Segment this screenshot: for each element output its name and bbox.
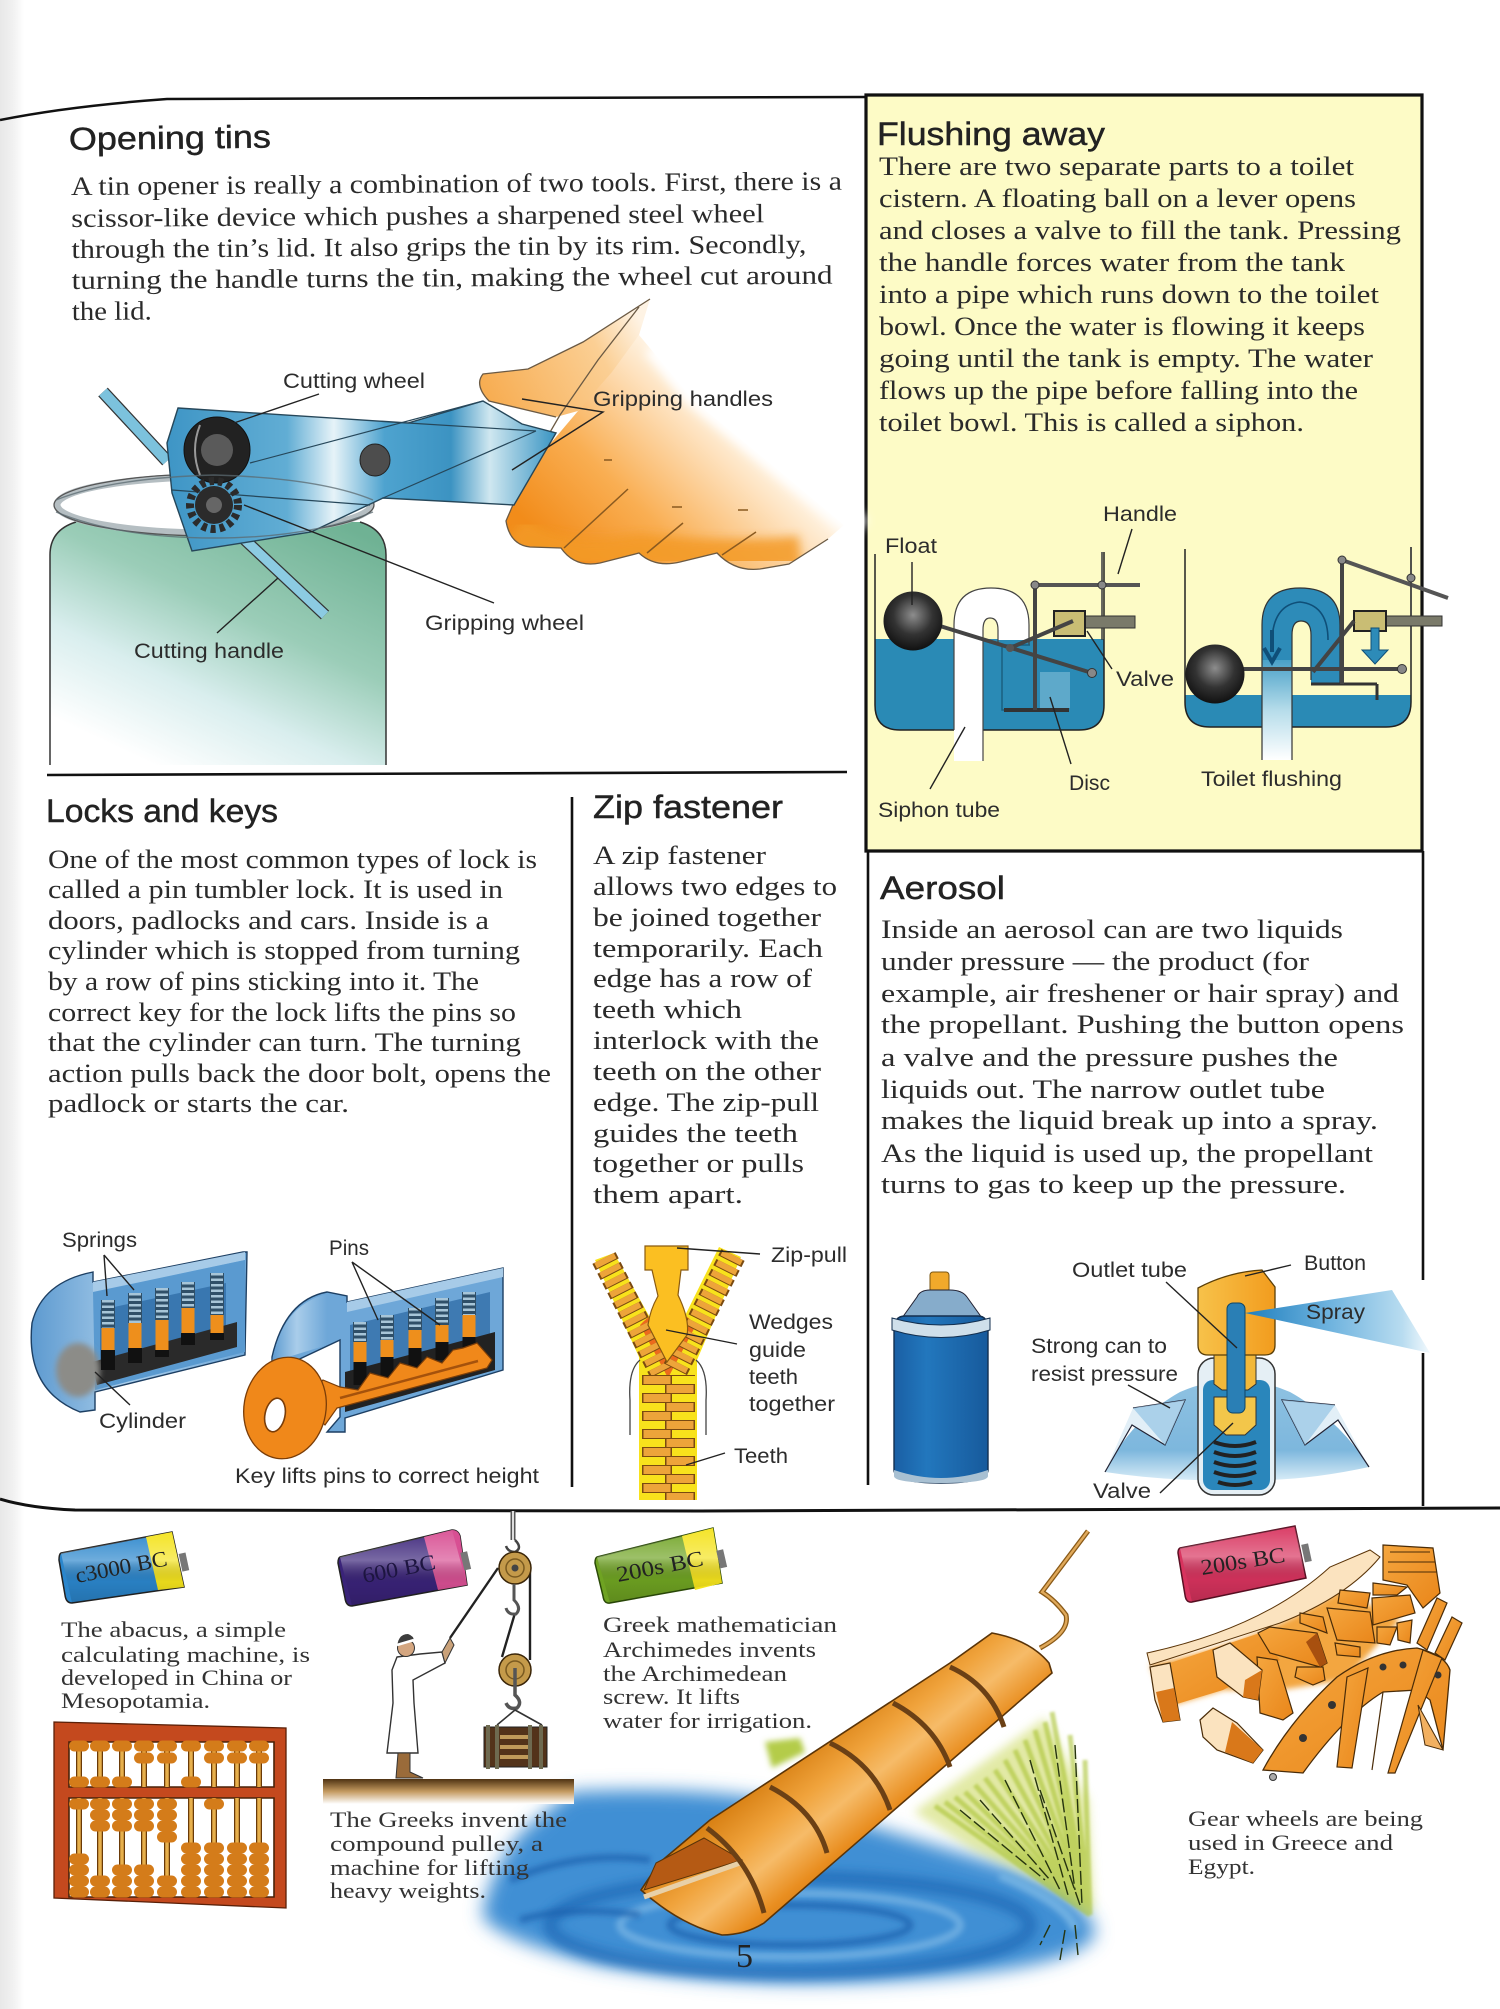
- text block: flushing away: going until the tank is empty. The water: [879, 343, 1373, 373]
- text block: flushing away: into a pipe which runs down to the toilet: [879, 279, 1380, 309]
- text block: zip fastener: be joined together: [593, 902, 821, 932]
- illustration: compound pulley: [387, 1511, 547, 1778]
- text block: zip fastener: teeth on the other: [593, 1056, 821, 1086]
- text block: zip fastener: [593, 840, 837, 1209]
- text block: opening tins: the lid.: [72, 295, 152, 326]
- text: compound pulley: heavy weights.: [330, 1878, 486, 1903]
- text block: zip fastener: A zip fastener: [593, 840, 766, 870]
- text: compound pulley: machine for lifting: [330, 1855, 529, 1880]
- label: handle: Handle: [1103, 503, 1177, 526]
- label: valve: [1087, 631, 1174, 691]
- label: key lifts pins: Key lifts pins to correct height: [235, 1465, 539, 1488]
- label: button: [1245, 1252, 1366, 1276]
- text block: locks and keys: called a pin tumbler lock. It is used in: [48, 874, 503, 904]
- text: gear wheels: [1188, 1806, 1423, 1879]
- panel: opening tins: [50, 119, 860, 765]
- text: compound pulley: [330, 1807, 567, 1903]
- label: gripping wheel: Gripping wheel: [425, 612, 584, 635]
- text block: flushing away: There are two separate parts to a toilet: [879, 151, 1355, 181]
- diagram: cistern filling: [875, 552, 1140, 761]
- text block: aerosol: liquids out. The narrow outlet tube: [881, 1074, 1325, 1104]
- label: button: Button: [1304, 1252, 1366, 1275]
- illustration: abacus: [54, 1722, 286, 1908]
- label: wedges guide teeth together: guide: [749, 1339, 806, 1362]
- text: gear wheels: used in Greece and: [1188, 1830, 1393, 1855]
- text: abacus: The abacus, a simple: [61, 1617, 286, 1642]
- text block: opening tins: through the tin’s lid. It also grips the tin by its rim. Secondly,: [71, 229, 806, 264]
- label: strong can: [1031, 1335, 1178, 1408]
- label: disc: Disc: [1069, 772, 1110, 795]
- label: teeth: Teeth: [734, 1445, 788, 1468]
- text block: aerosol: the propellant. Pushing the button opens: [881, 1009, 1404, 1039]
- text block: flushing away: and closes a valve to fill the tank. Pressing: [879, 215, 1401, 245]
- text block: flushing away: cistern. A floating ball on a lever opens: [879, 183, 1356, 213]
- text: abacus: calculating machine, is: [61, 1642, 310, 1667]
- label: wedges guide teeth together: Wedges: [749, 1311, 833, 1334]
- text block: flushing away: [879, 151, 1401, 437]
- label: wedges guide teeth together: together: [749, 1393, 835, 1416]
- label: zip-pull: [677, 1244, 847, 1267]
- text block: zip fastener: them apart.: [593, 1179, 743, 1209]
- text block: zip fastener: guides the teeth: [593, 1118, 798, 1148]
- text block: aerosol: [881, 914, 1404, 1199]
- text block: locks and keys: [48, 844, 551, 1118]
- battery: 600 BC: 600 BC: [360, 1549, 438, 1588]
- battery: 200s BC green: [595, 1528, 727, 1603]
- panel: flushing away background: [866, 96, 1422, 851]
- text block: flushing away: the handle forces water from the tank: [879, 247, 1346, 277]
- text block: opening tins: A tin opener is really a combination of two tools. First, there is a: [71, 166, 842, 201]
- battery: 200s BC red: [1178, 1526, 1312, 1602]
- label: teeth: [686, 1445, 788, 1468]
- text: compound pulley: The Greeks invent the: [330, 1807, 567, 1832]
- text block: locks and keys: padlock or starts the car.: [48, 1088, 349, 1118]
- label: gripping handles: Gripping handles: [593, 388, 773, 411]
- label: cylinder: [95, 1372, 186, 1433]
- text block: zip fastener: together or pulls: [593, 1148, 804, 1178]
- text block: aerosol: a valve and the pressure pushes the: [881, 1042, 1338, 1072]
- text block: locks and keys: action pulls back the door bolt, opens the: [48, 1058, 551, 1088]
- label: springs: Springs: [62, 1229, 137, 1252]
- text: archimedes: [603, 1612, 837, 1733]
- label: cutting wheel: Cutting wheel: [283, 370, 425, 393]
- panel: locks and keys: [31, 793, 551, 1488]
- text block: aerosol: example, air freshener or hair spray) and: [881, 978, 1399, 1008]
- text block: zip fastener: allows two edges to: [593, 871, 837, 901]
- label: spray: Spray: [1306, 1301, 1366, 1324]
- text block: aerosol: under pressure — the product (for: [881, 946, 1309, 976]
- text block: flushing away: flows up the pipe before falling into the: [879, 375, 1358, 405]
- label: valve: Valve: [1116, 668, 1174, 691]
- battery: 600 BC: [338, 1530, 471, 1606]
- text: archimedes: water for irrigation.: [603, 1708, 812, 1733]
- label: cutting handle: Cutting handle: [134, 640, 284, 663]
- illustration: aerosol can: [892, 1272, 990, 1483]
- label: strong can: resist pressure: [1031, 1363, 1178, 1386]
- text: abacus: Mesopotamia.: [61, 1688, 210, 1713]
- text block: zip fastener: interlock with the: [593, 1025, 819, 1055]
- label: gripping handles: [512, 388, 773, 470]
- illustration: lock without key: [31, 1252, 247, 1412]
- heading: locks and keys: Locks and keys: [46, 793, 278, 829]
- text: archimedes: Greek mathematician: [603, 1612, 837, 1637]
- text block: aerosol: As the liquid is used up, the propellant: [881, 1138, 1374, 1168]
- label: float: Float: [885, 535, 937, 558]
- label: strong can: Strong can to: [1031, 1335, 1167, 1358]
- text block: locks and keys: that the cylinder can turn. The turning: [48, 1027, 521, 1057]
- heading: aerosol: Aerosol: [880, 870, 1005, 906]
- illustration: zip: [595, 1246, 741, 1500]
- text: archimedes: the Archimedean: [603, 1661, 787, 1686]
- label: wedges guide teeth together: [666, 1311, 835, 1416]
- label: pins: Pins: [329, 1237, 369, 1260]
- label: float: [885, 535, 937, 605]
- illustration: archimedean screw: [641, 1531, 1088, 1935]
- battery: c3000 BC: [59, 1532, 189, 1603]
- label: siphon tube: [878, 727, 1000, 822]
- text: archimedes: screw. It lifts: [603, 1684, 740, 1709]
- text block: zip fastener: edge. The zip-pull: [593, 1087, 819, 1117]
- heading: flushing away: Flushing away: [877, 116, 1105, 152]
- text block: aerosol: Inside an aerosol can are two liquids: [881, 914, 1343, 944]
- text: abacus: developed in China or: [61, 1665, 293, 1690]
- reeds: [765, 1712, 1094, 1960]
- label: zip-pull: Zip-pull: [771, 1244, 847, 1267]
- diagram: toilet flushing: [1185, 547, 1448, 760]
- label: springs: [62, 1229, 137, 1296]
- text: gear wheels: Egypt.: [1188, 1854, 1255, 1879]
- ground: [323, 1779, 574, 1804]
- text block: locks and keys: correct key for the lock lifts the pins so: [48, 997, 516, 1027]
- text: compound pulley: compound pulley, a: [330, 1831, 543, 1856]
- text block: flushing away: bowl. Once the water is flowing it keeps: [879, 311, 1365, 341]
- label: cutting handle: [134, 578, 284, 663]
- water pool: [482, 1790, 1095, 1983]
- text block: flushing away: toilet bowl. This is called a siphon.: [879, 407, 1304, 437]
- illustration: aerosol cutaway: [1105, 1270, 1430, 1495]
- heading: zip fastener: Zip fastener: [593, 789, 783, 825]
- text block: locks and keys: by a row of pins sticking into it. The: [48, 966, 479, 996]
- illustration: hand: [480, 299, 860, 569]
- text block: locks and keys: One of the most common types of lock is: [48, 844, 537, 874]
- label: outlet tube: Outlet tube: [1072, 1259, 1187, 1282]
- label: wedges guide teeth together: teeth: [749, 1366, 798, 1389]
- label: valve: Valve: [1093, 1480, 1151, 1503]
- label: cutting wheel: [231, 370, 425, 424]
- text block: locks and keys: cylinder which is stopped from turning: [48, 935, 520, 965]
- battery: 200s BC red: 200s BC: [1199, 1542, 1287, 1580]
- text block: locks and keys: doors, padlocks and cars. Inside is a: [48, 905, 489, 935]
- battery: 200s BC green: 200s BC: [614, 1546, 705, 1587]
- text block: opening tins: [71, 166, 843, 326]
- text block: opening tins: scissor-like device which pushes a sharpened steel wheel: [71, 198, 764, 233]
- label: outlet tube: [1072, 1259, 1237, 1348]
- illustration: lock with key: [236, 1268, 503, 1465]
- text block: zip fastener: teeth which: [593, 994, 742, 1024]
- panel: timeline: [54, 1511, 1462, 1983]
- text block: zip fastener: edge has a row of: [593, 963, 812, 993]
- label: handle: [1103, 503, 1177, 574]
- panel: flushing away: [875, 116, 1448, 822]
- label: gripping wheel: [244, 505, 584, 635]
- panel: aerosol: [880, 870, 1430, 1503]
- text: abacus: [61, 1617, 310, 1713]
- label: valve: [1093, 1423, 1233, 1503]
- illustration: tin can: [50, 474, 386, 765]
- illustration: gear wheels: [1147, 1545, 1462, 1780]
- label: pins: [329, 1237, 440, 1325]
- label: disc: [1050, 697, 1110, 795]
- text: archimedes: Archimedes invents: [603, 1637, 816, 1662]
- text block: zip fastener: temporarily. Each: [593, 933, 823, 963]
- heading: opening tins: Opening tins: [69, 119, 271, 157]
- battery: c3000 BC: c3000 BC: [73, 1546, 169, 1588]
- text block: aerosol: makes the liquid break up into a spray.: [881, 1105, 1378, 1135]
- illustration: tin opener: [56, 392, 556, 615]
- label: toilet flushing: Toilet flushing: [1201, 768, 1342, 791]
- label: cylinder: Cylinder: [99, 1410, 186, 1433]
- page number: 5: [736, 1938, 753, 1975]
- label: siphon tube: Siphon tube: [878, 799, 1000, 822]
- text block: opening tins: turning the handle turns the tin, making the wheel cut around: [71, 260, 833, 295]
- panel: zip fastener: [593, 789, 847, 1500]
- text: gear wheels: Gear wheels are being: [1188, 1806, 1423, 1831]
- text block: aerosol: turns to gas to keep up the pressure.: [881, 1169, 1346, 1199]
